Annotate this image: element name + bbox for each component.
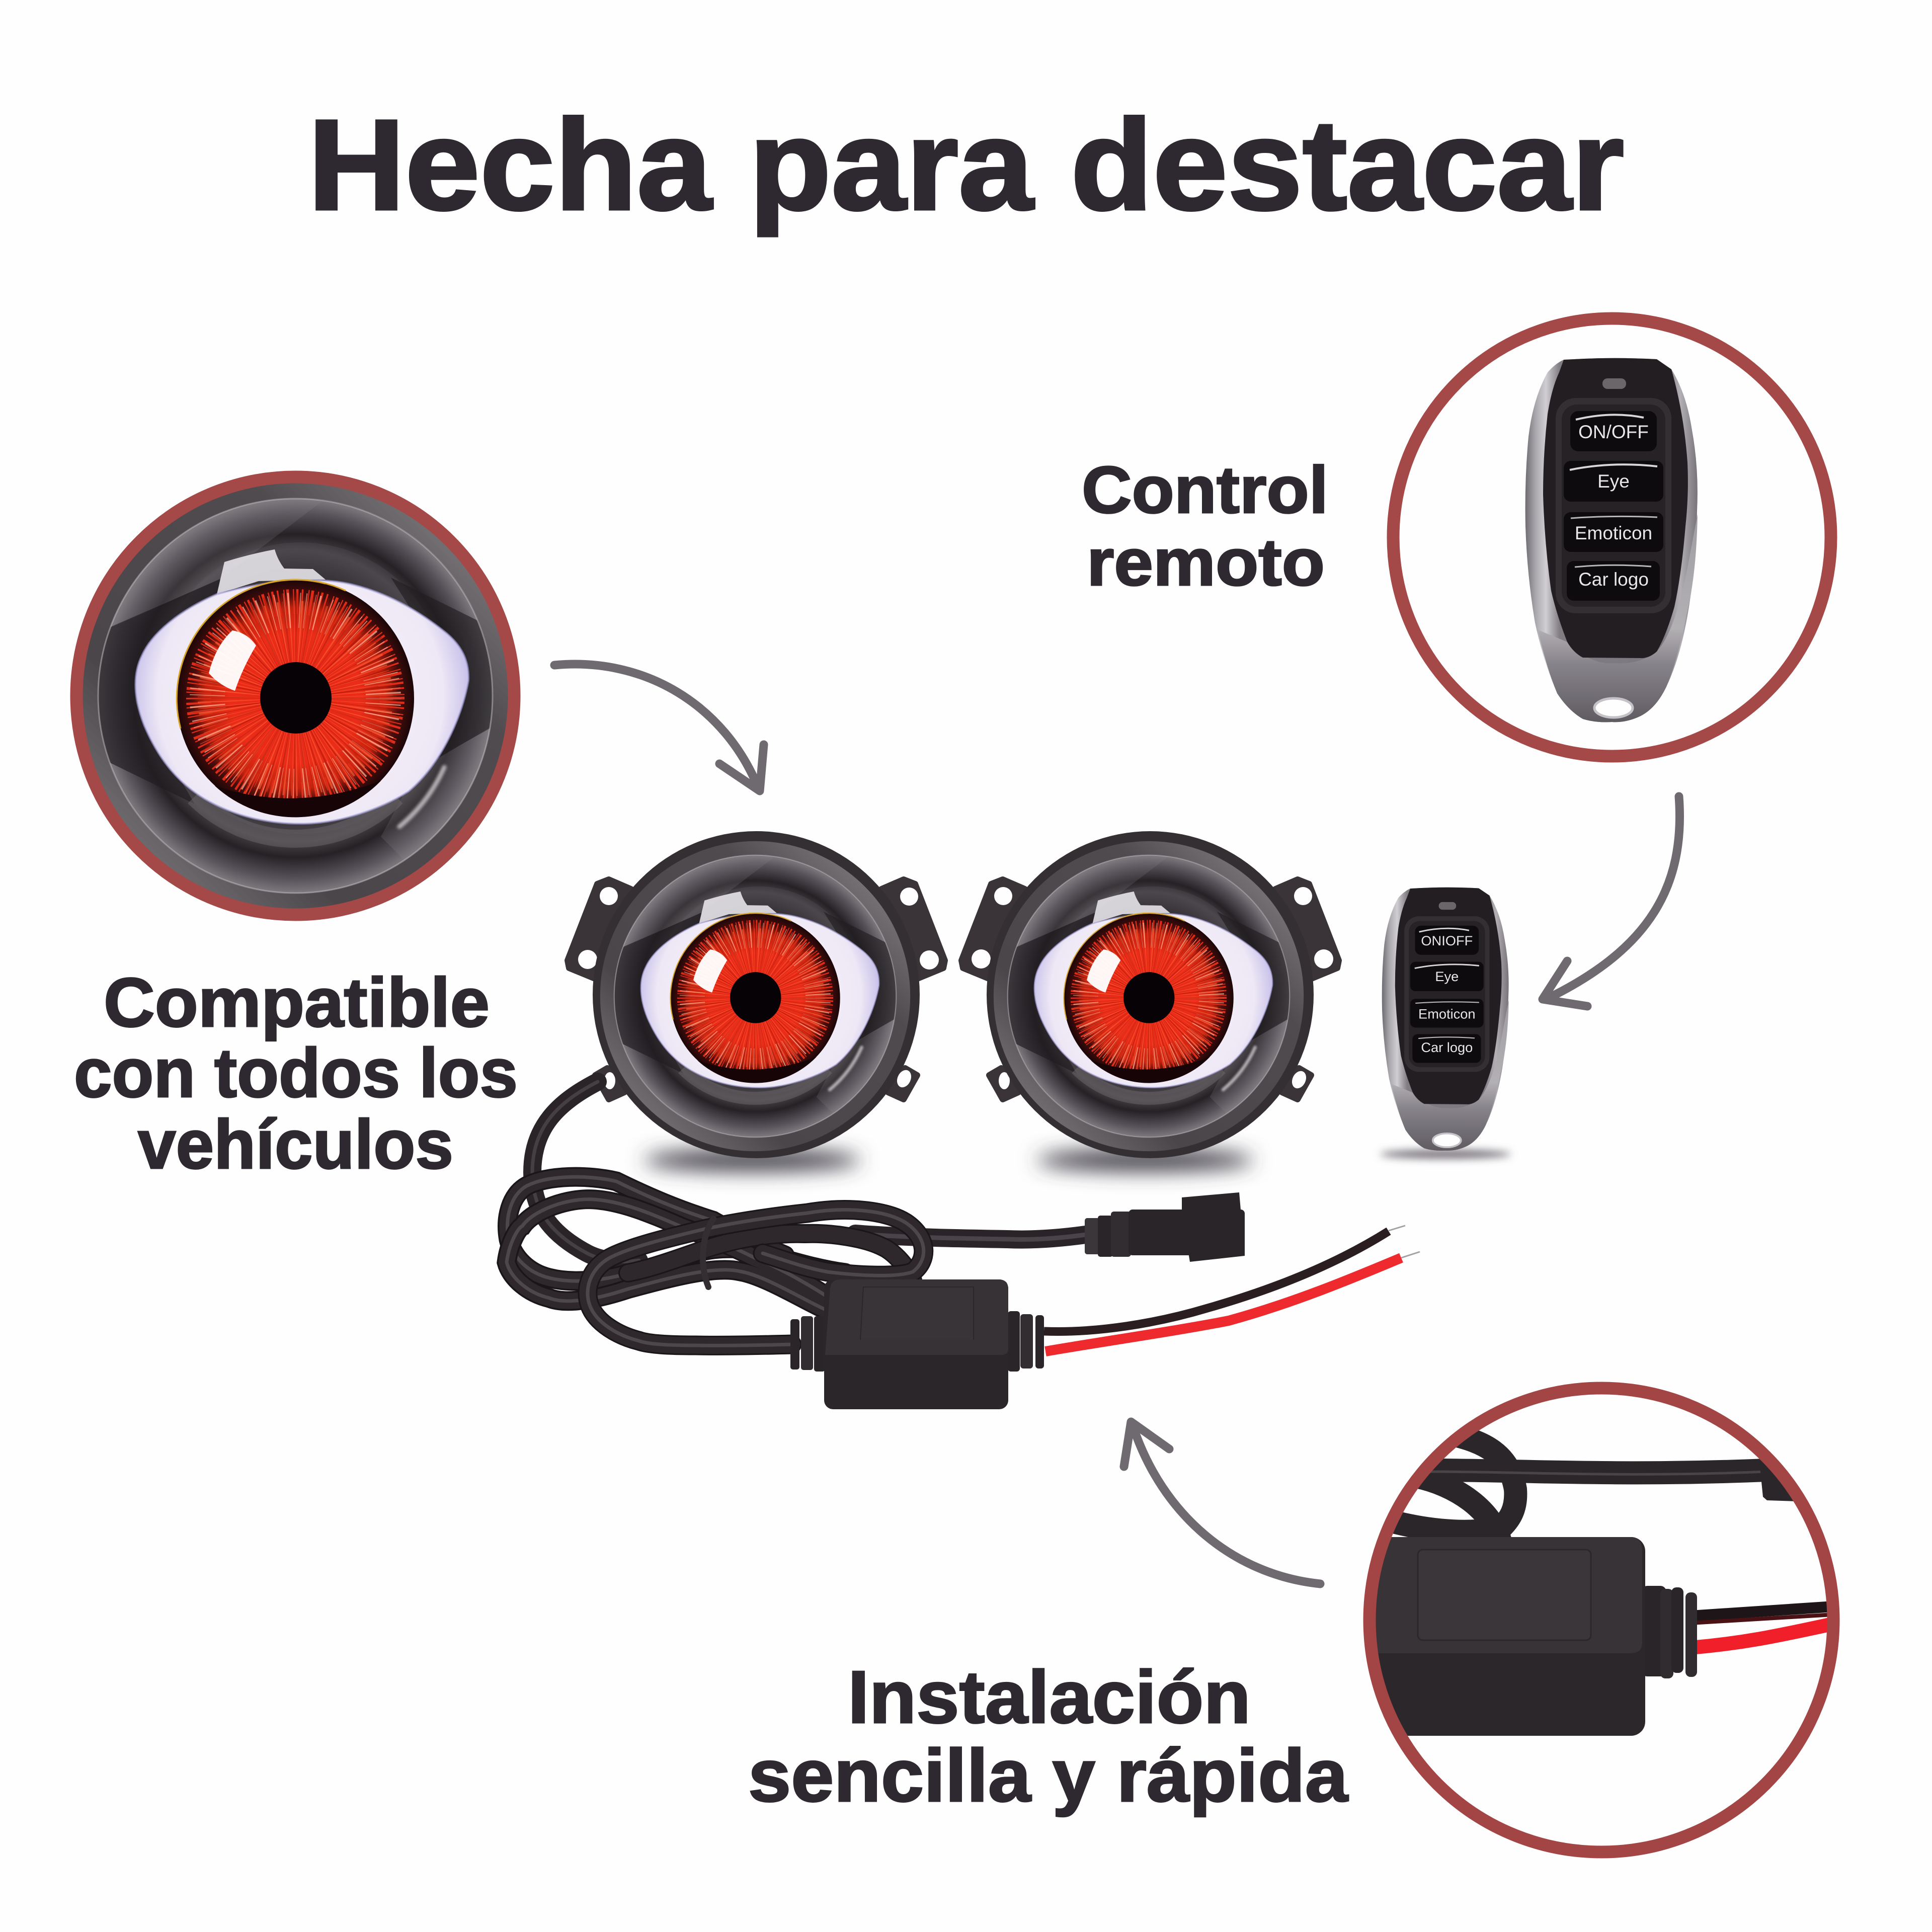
product: small remote (1380, 888, 1511, 1159)
heading: instalacion sencilla y rapida: Instalación (848, 1656, 1251, 1739)
heading: compatible con todos los vehiculos: vehículos (138, 1106, 453, 1183)
icon: large remote (1525, 358, 1698, 722)
panel: remote close-up circle (1393, 318, 1831, 756)
heading: compatible con todos los vehiculos (74, 964, 518, 1183)
connector plug (1085, 1192, 1245, 1262)
product: small remote: ONIOFF (1421, 933, 1473, 948)
product: left eye lens (568, 831, 945, 1171)
heading: control remoto (1082, 453, 1328, 599)
arrow: remote circle to small remote (1543, 796, 1680, 1006)
product: small remote: Eye (1435, 969, 1459, 984)
panel: control box close-up circle (1338, 1388, 1841, 1852)
product: small remote: Car logo (1421, 1040, 1473, 1055)
icon: large remote: ON/OFF (1578, 422, 1649, 442)
red and black wires (1044, 1226, 1420, 1351)
panel: eye close-up circle (76, 477, 514, 915)
icon: large remote: Car logo (1578, 569, 1649, 590)
heading: instalacion sencilla y rapida (748, 1656, 1349, 1817)
product: right eye lens (961, 831, 1339, 1171)
title: Hecha para destacar (308, 93, 1624, 237)
icon: large remote: Emoticon (1575, 523, 1652, 543)
arrow: bottom circle to control box (1124, 1422, 1320, 1584)
arrow: eye circle to lenses (554, 664, 764, 791)
heading: control remoto: Control (1082, 453, 1328, 527)
control box (790, 1279, 1044, 1409)
heading: instalacion sencilla y rapida: sencilla y rápida (748, 1734, 1349, 1817)
product: small remote: Emoticon (1418, 1006, 1476, 1021)
heading: compatible con todos los vehiculos: con todos los (74, 1034, 518, 1112)
heading: control remoto: remoto (1087, 525, 1325, 599)
product: wiring harness (507, 1082, 1420, 1409)
icon: large remote: Eye (1597, 471, 1630, 492)
heading: compatible con todos los vehiculos: Compatible (104, 964, 490, 1041)
